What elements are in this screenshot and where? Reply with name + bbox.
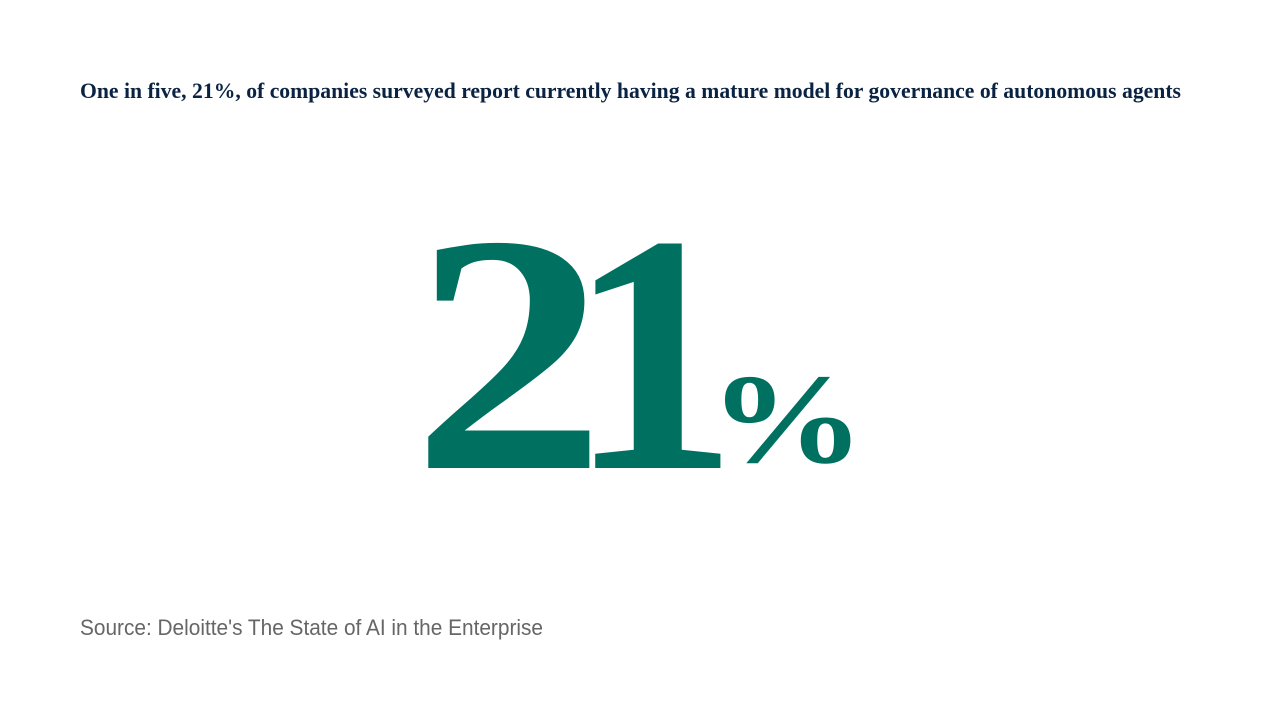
source note: Source: Deloitte's The State of AI in the Enterprise — [80, 615, 543, 640]
big statistic: 21% — [412, 165, 865, 542]
percent sign: % — [709, 348, 865, 490]
title: One in five, 21%, of companies surveyed report currently having a mature model for governance of autonomous agents — [80, 78, 1181, 103]
digit 1: 1 — [568, 165, 738, 542]
digit 2: 2 — [412, 165, 606, 542]
